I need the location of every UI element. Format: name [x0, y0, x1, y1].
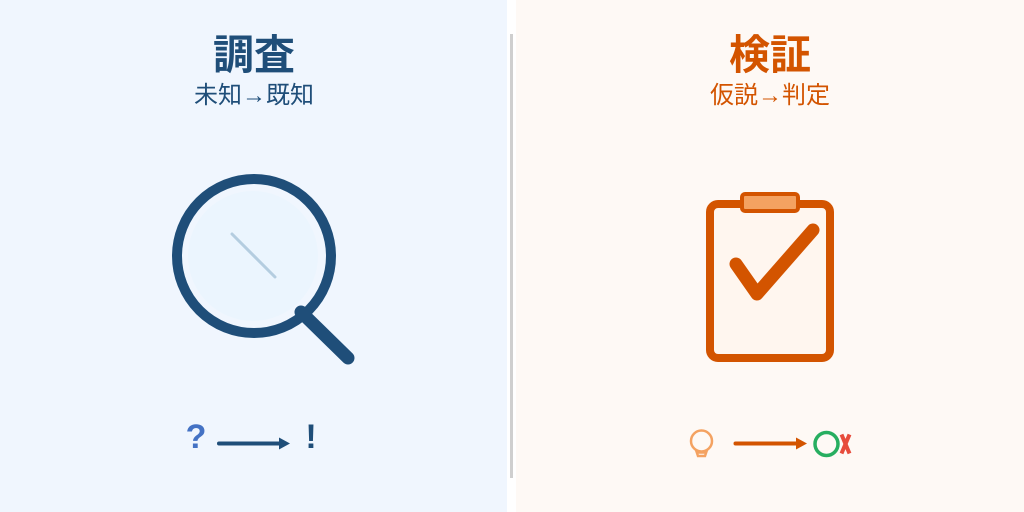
arrow: question to exclamation	[219, 438, 290, 450]
icon: clipboard with check	[710, 194, 830, 358]
panel: verification background	[516, 0, 1024, 512]
arrow: bulb to result	[736, 438, 807, 450]
icon: red cross	[842, 434, 850, 454]
center divider	[510, 34, 513, 478]
panel: investigation background	[0, 0, 507, 512]
icon: light bulb	[691, 430, 712, 456]
icon: exclamation mark: !	[305, 418, 317, 456]
subtitle: unknown to known: 未知→既知	[194, 82, 314, 109]
subtitle: hypothesis to judgment: 仮説→判定	[710, 82, 830, 109]
title: investigation: 調査	[213, 32, 295, 78]
icon: question mark: ?	[186, 418, 206, 456]
icon: magnifying glass	[177, 179, 348, 358]
title: verification: 検証	[729, 32, 811, 78]
icon: green circle	[815, 432, 838, 456]
